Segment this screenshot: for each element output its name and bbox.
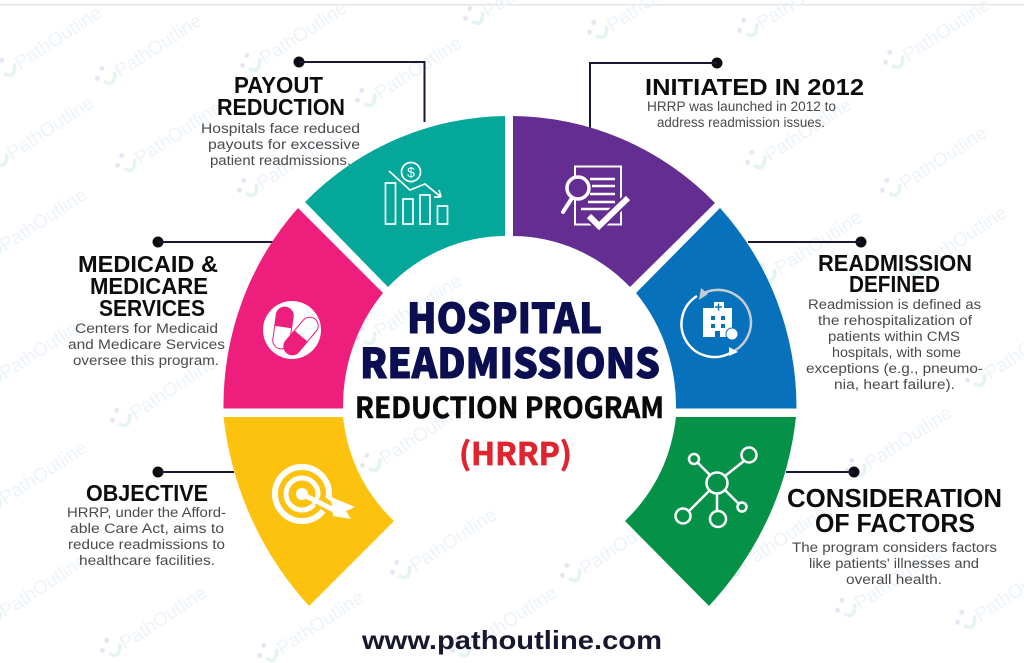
watermark pattern: PathOutline <box>111 11 206 82</box>
watermark pattern: PathOutline <box>371 271 466 342</box>
text block: payout reduction: Hospitals face reduced <box>201 121 360 136</box>
text block: consideration of factors: The program considers factors <box>792 540 997 555</box>
title: REDUCTION PROGRAM <box>355 385 664 427</box>
text block: consideration of factors: OF FACTORS <box>815 508 975 538</box>
watermark pattern: PathOutline <box>851 543 946 614</box>
watermark pattern: PathOutline <box>466 583 561 654</box>
text block: objective: reduce readmissions to <box>68 537 225 552</box>
text block: consideration of factors: CONSIDERATION <box>787 483 1002 513</box>
text block: initiated in 2012: INITIATED IN 2012 <box>645 74 864 100</box>
text block: payout reduction: payouts for excessive <box>208 137 360 152</box>
text block: readmission defined: exceptions (e.g., pneumo- <box>806 361 983 376</box>
title <box>355 285 664 474</box>
segment: blue readmission <box>636 208 797 408</box>
text block: readmission defined: hospitals, with some <box>832 345 961 360</box>
watermark pattern: PathOutline <box>126 353 221 424</box>
segment: pink medicaid <box>223 208 383 408</box>
watermark pattern: PathOutline <box>736 503 831 574</box>
text block: consideration of factors: like patients' illnesses and <box>809 556 979 571</box>
watermark pattern: PathOutline <box>771 208 866 279</box>
icon: pill capsules <box>263 301 322 359</box>
leader line: initiated in 2012 <box>590 58 722 130</box>
icon: target with arrow <box>275 467 355 521</box>
text block: readmission defined: READMISSION <box>818 250 972 276</box>
leader line: objective <box>152 466 234 478</box>
text block: payout reduction: REDUCTION <box>217 94 345 120</box>
watermark pattern: PathOutline <box>131 98 226 169</box>
watermark pattern: PathOutline <box>253 123 348 194</box>
text block: readmission defined: patients within CMS <box>828 329 960 344</box>
watermark pattern: PathOutline <box>406 505 501 576</box>
text block: objective: OBJECTIVE <box>86 480 208 506</box>
segment: teal payout reduction <box>305 116 505 287</box>
leader line: consideration of factors <box>786 466 860 478</box>
watermark pattern: PathOutline <box>376 398 471 469</box>
watermark pattern: PathOutline <box>896 123 991 194</box>
text block: readmission defined: Readmission is defined as <box>808 297 981 312</box>
watermark pattern: PathOutline <box>116 583 211 654</box>
watermark pattern: PathOutline <box>576 508 671 579</box>
text block: consideration of factors <box>787 483 1002 587</box>
text block: objective: HRRP, under the Afford- <box>67 505 226 520</box>
text block: initiated in 2012: address readmission issues. <box>657 115 825 130</box>
text block: payout reduction <box>201 72 360 168</box>
icon: network of factors <box>676 448 756 527</box>
title: HOSPITAL <box>407 285 602 345</box>
segment: yellow objective <box>224 417 394 606</box>
segment: purple initiated <box>513 116 715 287</box>
watermark pattern: PathOutline <box>861 403 956 474</box>
text block: objective: able Care Act, aims to <box>70 521 224 536</box>
text block: medicaid and medicare services: oversee this program. <box>73 353 219 368</box>
text block: medicaid and medicare services: SERVICES <box>99 295 205 321</box>
footer website: www.pathoutline.com <box>361 625 662 655</box>
text block: medicaid and medicare services: MEDICARE <box>90 273 208 299</box>
icon: falling revenue chart <box>386 162 448 224</box>
title: (HRRP) <box>459 429 572 474</box>
text block: medicaid and medicare services: Centers for Medicaid <box>75 321 218 336</box>
leader line: readmission defined <box>748 236 866 248</box>
text block: payout reduction: PAYOUT <box>234 72 323 98</box>
watermark pattern: PathOutline <box>761 95 856 166</box>
text block: initiated in 2012: HRRP was launched in 2012 to <box>647 99 836 114</box>
text block: medicaid and medicare services: MEDICAID & <box>78 251 218 277</box>
title: READMISSIONS <box>360 330 660 390</box>
watermark pattern: PathOutline <box>916 203 1011 274</box>
text block: payout reduction: patient readmissions. <box>210 153 351 168</box>
watermark pattern: PathOutline <box>273 588 368 659</box>
leader line: medicaid and medicare services <box>152 236 274 248</box>
leader line: payout reduction <box>294 56 424 122</box>
text block: consideration of factors: overall health. <box>846 572 942 587</box>
text block: medicaid and medicare services <box>68 251 225 368</box>
watermark pattern: PathOutline <box>11 3 106 74</box>
watermark pattern: PathOutline <box>3 93 98 164</box>
text block: readmission defined: the rehospitalization of <box>818 313 972 328</box>
text block: readmission defined: nia, heart failure). <box>834 377 955 392</box>
icon: document with magnifier and check <box>563 166 628 226</box>
text block: readmission defined <box>806 250 983 392</box>
segment: green factors <box>625 417 796 606</box>
text block: initiated in 2012 <box>645 74 864 130</box>
icon: falling revenue chart: $ <box>407 164 415 180</box>
text block: objective: healthcare facilities. <box>79 553 215 568</box>
text block: medicaid and medicare services: and Medicare Services <box>68 337 225 352</box>
text block: readmission defined: DEFINED <box>849 271 940 297</box>
text block: objective <box>67 480 226 568</box>
watermark pattern: PathOutline <box>371 33 466 104</box>
icon: hospital with cycle arrows <box>681 288 751 357</box>
